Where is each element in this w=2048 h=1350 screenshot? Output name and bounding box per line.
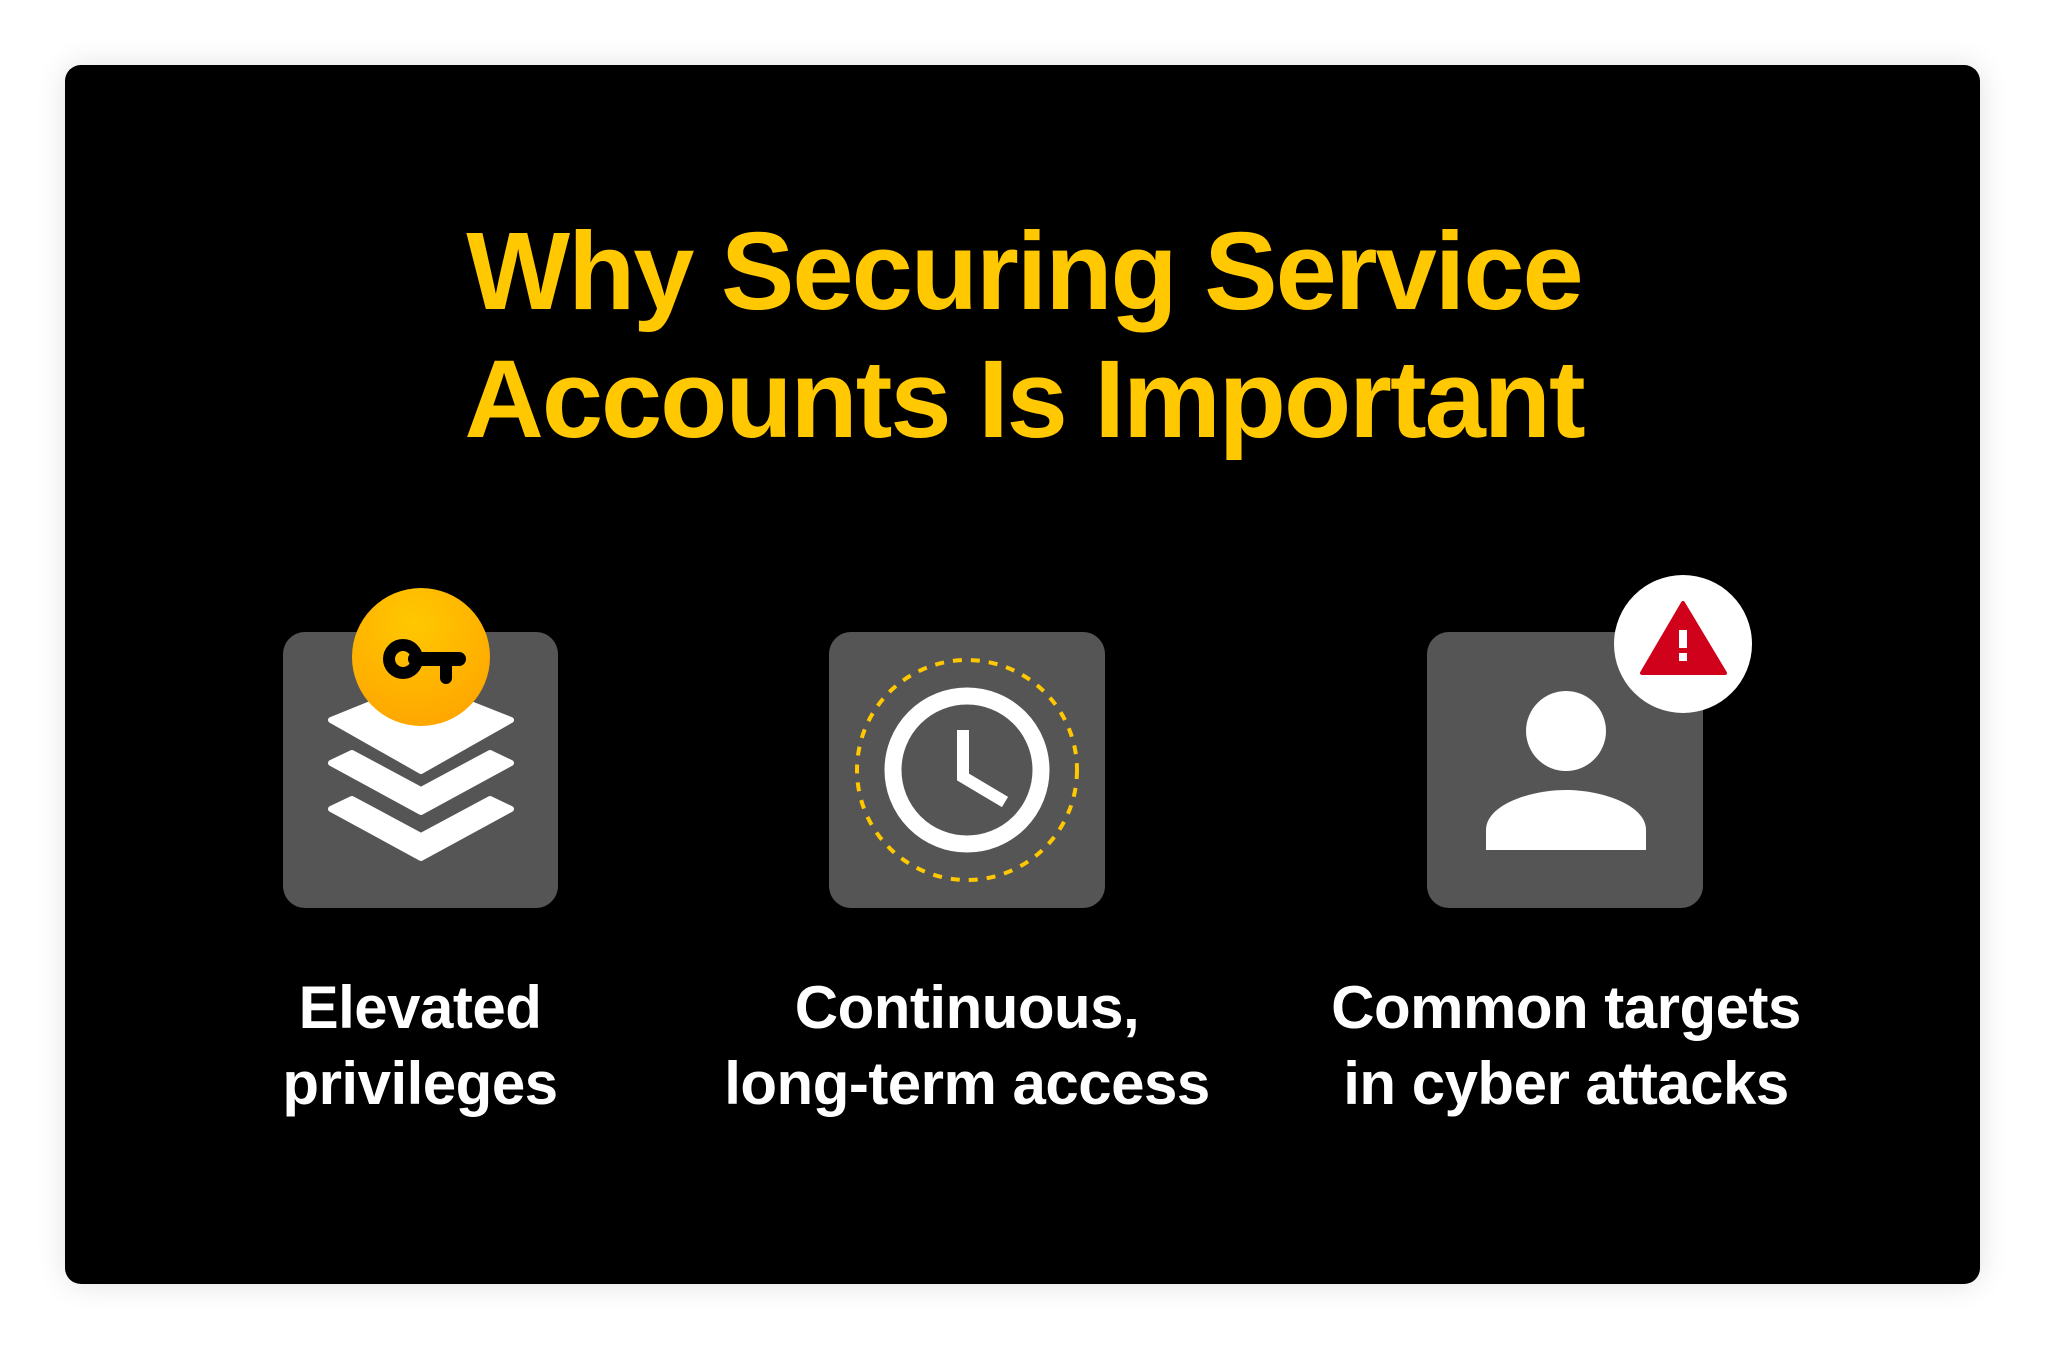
label: continuous access: Continuous, [795, 974, 1139, 1041]
label: common targets [1331, 974, 1801, 1117]
label: common targets: Common targets [1331, 974, 1801, 1041]
icon: user with warning [1427, 575, 1752, 908]
title [464, 210, 1584, 461]
icon: clock [829, 632, 1105, 908]
title: Why Securing Service [466, 210, 1582, 333]
label: continuous access [724, 974, 1210, 1117]
icon: layers with key [283, 588, 558, 908]
label: elevated privileges [282, 974, 558, 1117]
label: elevated privileges: Elevated [299, 974, 541, 1041]
label: continuous access: long-term access [724, 1050, 1210, 1117]
label: elevated privileges: privileges [282, 1050, 558, 1117]
label: common targets: in cyber attacks [1343, 1050, 1789, 1117]
title: Accounts Is Important [464, 338, 1584, 461]
